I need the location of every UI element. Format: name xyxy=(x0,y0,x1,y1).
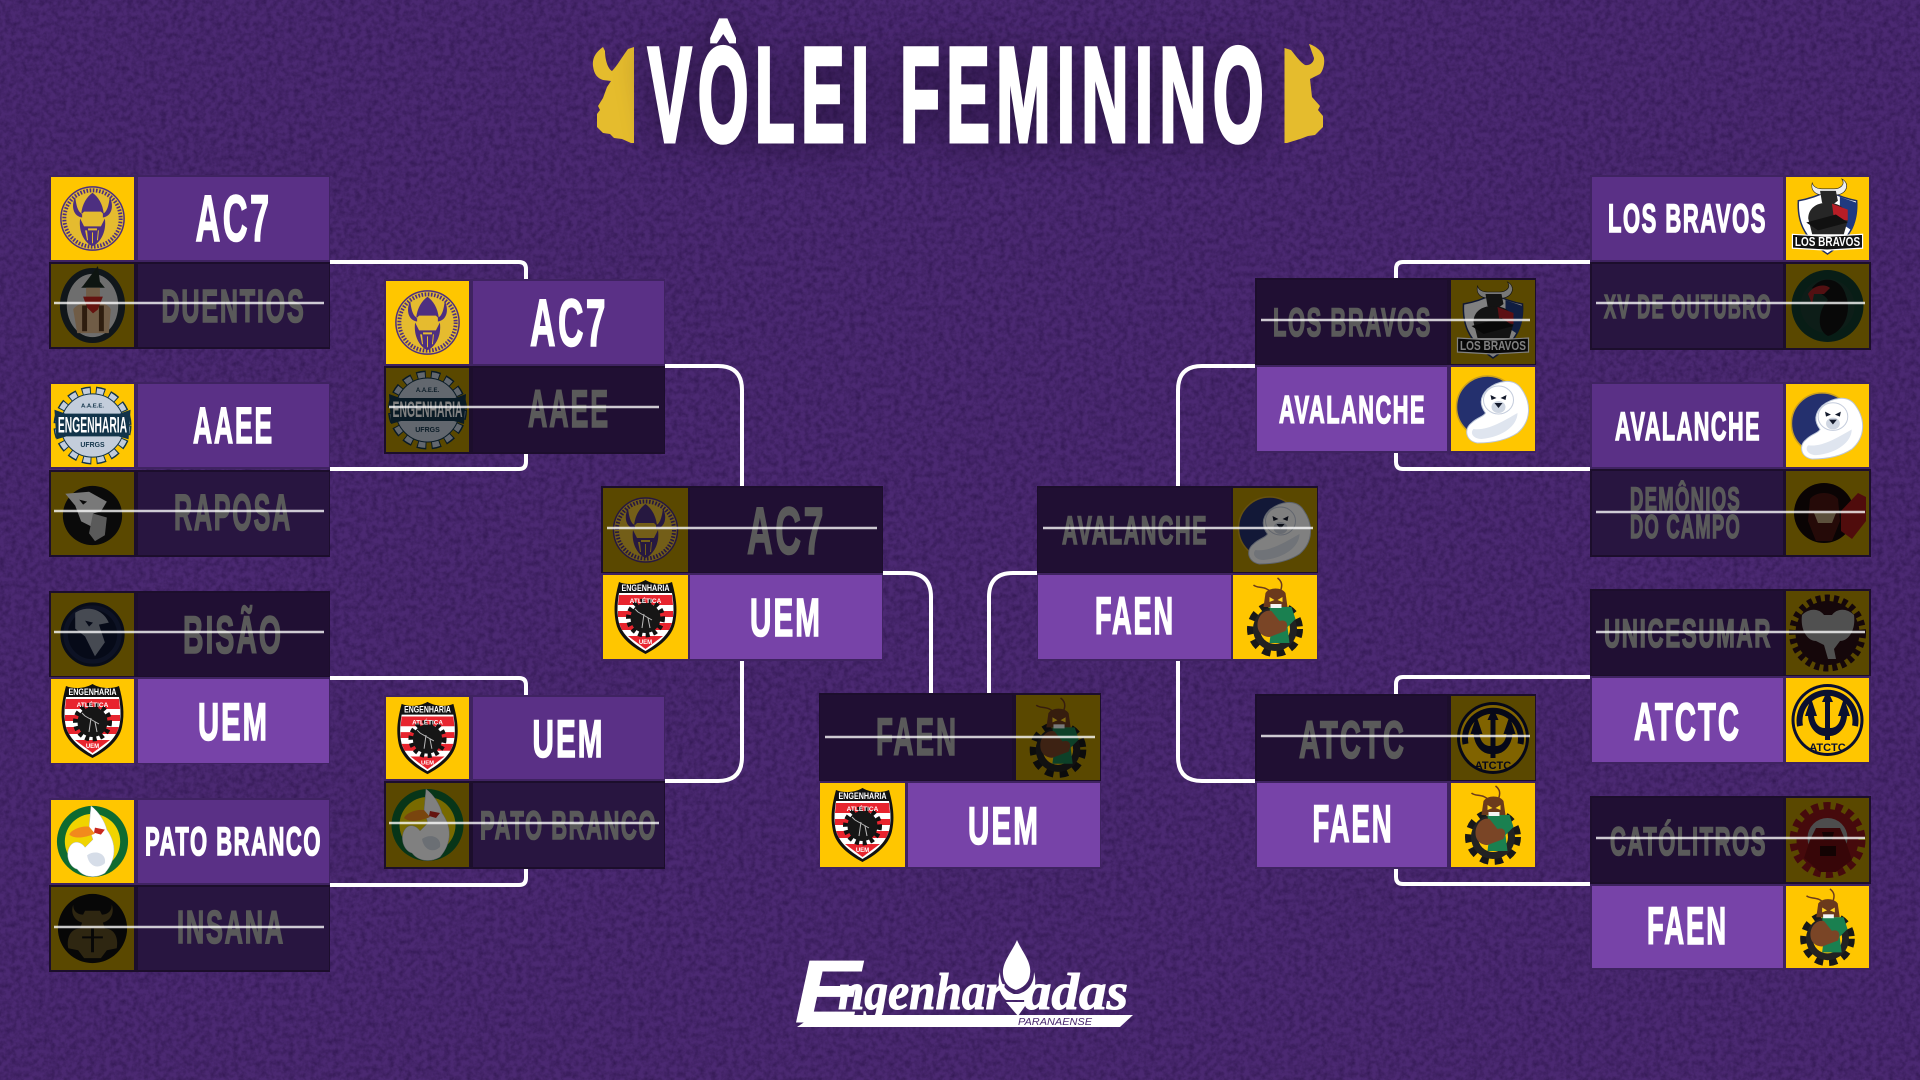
logo big E: E xyxy=(795,942,864,1041)
team card: Unicesumar eliminated: UNICESUMAR xyxy=(1604,612,1772,656)
team card: AC7 round 1: AC7 xyxy=(196,181,272,255)
team card: Duentios eliminated xyxy=(49,262,330,349)
team card: UEM round 2: UEM xyxy=(532,710,604,769)
team card: UEM round 1 xyxy=(49,677,330,764)
logo subtitle: PARANAENSE xyxy=(1018,1016,1093,1028)
team card: FAEN final eliminated: FAEN xyxy=(876,708,958,767)
team card: UEM round 3: UEM xyxy=(750,588,822,648)
team card: Duentios eliminated: DUENTIOS xyxy=(162,280,306,332)
team card: FAEN round 3: FAEN xyxy=(1095,587,1175,646)
team card: UEM round 2 xyxy=(384,695,665,781)
team card: Avalanche round 3 eliminated xyxy=(1037,486,1318,574)
logo swoosh bar xyxy=(797,1015,1133,1027)
team card: UEM final champion: UEM xyxy=(968,797,1040,856)
team card: Pato Branco round 1 xyxy=(49,798,330,885)
team card: ATCTC round 1: ATCTC xyxy=(1634,693,1741,752)
team card: Avalanche round 1 xyxy=(1590,382,1871,469)
team card: ATCTC round 2 eliminated: ATCTC xyxy=(1299,711,1406,770)
team card: AC7 round 2 xyxy=(384,279,665,366)
logo torch xyxy=(999,940,1035,1016)
team card: Los Bravos round 1 xyxy=(1590,175,1871,262)
team card: Pato Branco round 2 eliminated: PATO BRANCO xyxy=(480,804,657,848)
team card: Insana eliminated xyxy=(49,885,330,972)
team card: AAEE round 2 eliminated: AAEE xyxy=(528,380,610,439)
team card: Avalanche round 1: AVALANCHE xyxy=(1615,405,1761,449)
logo wordmark end: adas xyxy=(1024,964,1128,1021)
team card: Demônios do Campo eliminated: DO CAMPO xyxy=(1630,508,1741,545)
team card: Insana eliminated: INSANA xyxy=(177,901,285,953)
team card: Los Bravos round 1: LOS BRAVOS xyxy=(1608,197,1767,241)
team card: Demônios do Campo eliminated: DEMÔNIOS xyxy=(1630,481,1741,517)
title: Vôlei Feminino xyxy=(593,21,1324,170)
team card: ATCTC round 2 eliminated xyxy=(1255,694,1536,782)
team card: Bisão eliminated: BISÃO xyxy=(183,605,283,665)
connectors: right bracket lines xyxy=(989,262,1591,884)
team card: AC7 round 2: AC7 xyxy=(530,286,608,361)
team card: Raposa eliminated: RAPOSA xyxy=(174,484,292,541)
team card: Unicesumar eliminated xyxy=(1590,589,1871,677)
team card: Católitros eliminated: CATÓLITROS xyxy=(1610,818,1767,864)
team card: Pato Branco round 1: PATO BRANCO xyxy=(145,820,322,864)
team card: UEM round 3 xyxy=(601,573,883,661)
team card: Pato Branco round 2 eliminated xyxy=(384,781,665,869)
team card: AAEE round 2 eliminated xyxy=(384,366,665,454)
team card: Demônios do Campo eliminated xyxy=(1590,469,1871,557)
team card: FAEN round 3 xyxy=(1037,573,1318,661)
team card: AAEE round 1: AAEE xyxy=(193,397,274,454)
team card: UEM final champion xyxy=(819,781,1101,869)
team card: Los Bravos round 2 eliminated: LOS BRAVOS xyxy=(1273,301,1432,345)
icon: right half bison head xyxy=(1284,44,1324,143)
team card: FAEN round 2 xyxy=(1255,781,1536,869)
logo: Engenhariadas Paranaense xyxy=(795,940,1133,1041)
team card: AC7 round 3 eliminated: AC7 xyxy=(747,494,826,569)
team card: Avalanche round 2 xyxy=(1255,365,1536,453)
team card: FAEN final eliminated xyxy=(819,693,1101,782)
team card: Bisão eliminated xyxy=(49,591,330,678)
team card: UEM round 1: UEM xyxy=(198,693,269,752)
team card: XV de Outubro eliminated: XV DE OUTUBRO xyxy=(1604,288,1772,325)
team card: XV de Outubro eliminated xyxy=(1590,262,1871,350)
team card: AC7 round 3 eliminated xyxy=(601,486,883,574)
title: Vôlei Feminino: VÔLEI FEMININO xyxy=(648,21,1270,170)
team card: AAEE round 1 xyxy=(49,382,330,469)
team card: ATCTC round 1 xyxy=(1590,676,1871,764)
team card: Católitros eliminated xyxy=(1590,796,1871,884)
team card: AC7 round 1 xyxy=(49,175,330,262)
team card: Los Bravos round 2 eliminated xyxy=(1255,278,1536,366)
team card: Raposa eliminated xyxy=(49,470,330,557)
connectors: left bracket lines xyxy=(330,262,931,885)
team card: FAEN round 1: FAEN xyxy=(1647,897,1728,956)
team card: FAEN round 2: FAEN xyxy=(1312,795,1394,854)
team card: FAEN round 1 xyxy=(1590,884,1871,970)
icon: left half bison head xyxy=(593,47,634,143)
team card: Avalanche round 3 eliminated: AVALANCHE xyxy=(1062,509,1208,553)
team card: Avalanche round 2: AVALANCHE xyxy=(1279,389,1426,432)
logo wordmark: ngenhar xyxy=(838,964,1005,1021)
